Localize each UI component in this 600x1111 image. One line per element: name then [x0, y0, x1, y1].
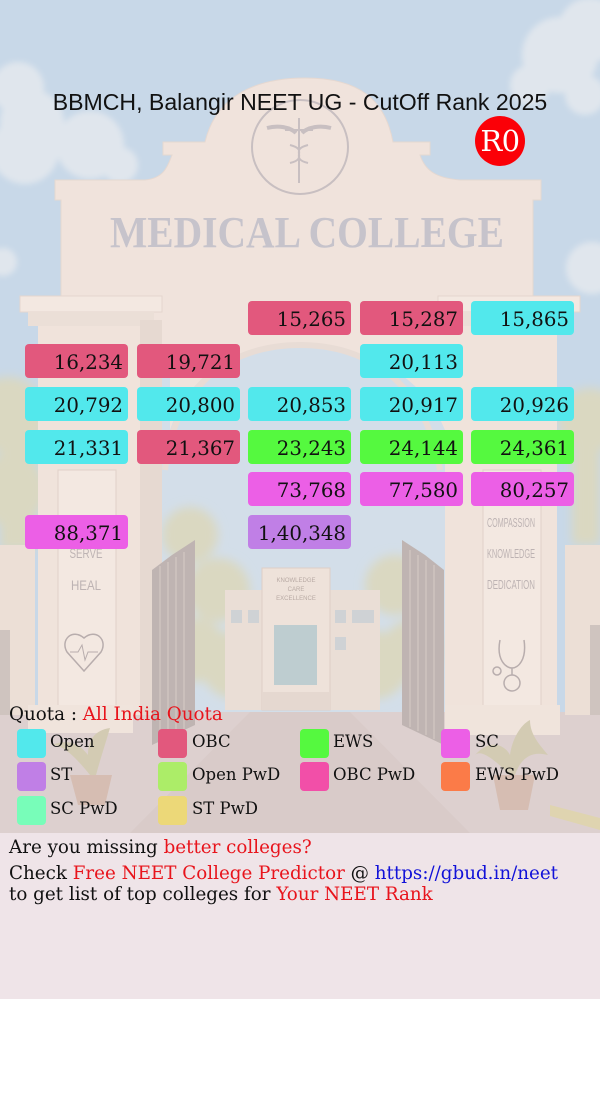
rank tile: 21,367 OBC: 21,367 [166, 437, 235, 460]
background illustration: medical college gate [0, 0, 600, 833]
rear building [225, 568, 380, 710]
cutoff rank tile grid [25, 301, 574, 549]
promo panel [0, 833, 600, 999]
rank tile: 20,926 Open: 20,926 [500, 394, 569, 417]
rank tile: 20,792 Open: 20,792 [54, 394, 123, 417]
rank tile: 15,865 Open [471, 301, 574, 335]
rank tile: 20,917 Open [360, 387, 463, 421]
round badge: R0: R0 [480, 124, 520, 158]
road [0, 712, 600, 833]
legend label: OBC: OBC [192, 732, 231, 751]
rank tile: 21,331 Open [25, 430, 128, 464]
gate top panel [55, 78, 541, 300]
legend swatch: EWS PwD [441, 762, 470, 791]
rank tile: 15,287 OBC [360, 301, 463, 335]
right pillar [438, 296, 580, 735]
left pillar: HEAL [71, 577, 101, 593]
rank tile: 15,265 OBC: 15,265 [277, 308, 346, 331]
rank tile: 19,721 OBC [137, 344, 240, 378]
pots and plants [52, 720, 548, 775]
legend swatch: Open PwD [158, 762, 187, 791]
legend swatch: EWS [300, 729, 329, 758]
legend label: EWS PwD: EWS PwD [475, 765, 559, 784]
rank tile: 80,257 SC: 80,257 [500, 479, 569, 502]
gate inscription: MEDICAL COLLEGE [110, 208, 504, 257]
promo line: college predictor link: Check Free NEET College Predictor @ https://gbud.in/neet [9, 863, 558, 884]
legend swatch: ST PwD [158, 796, 187, 825]
rank tile: 1,40,348 ST: 1,40,348 [258, 522, 346, 545]
rank tile: 80,257 SC [471, 472, 574, 506]
rank tile: 88,371 SC: 88,371 [54, 522, 123, 545]
round badge: R0 [475, 116, 525, 166]
rear building: KNOWLEDGE [276, 578, 316, 584]
rank tile: 21,367 OBC [137, 430, 240, 464]
rank tile: 19,721 OBC: 19,721 [166, 351, 235, 374]
rank tile: 20,917 Open: 20,917 [389, 394, 458, 417]
rank tile: 15,865 Open: 15,865 [500, 308, 569, 331]
legend label: ST: ST [50, 765, 72, 784]
legend label: EWS: EWS [333, 732, 373, 751]
legend swatch: Open [17, 729, 46, 758]
rank tile: 77,580 SC: 77,580 [389, 479, 458, 502]
right pillar: KNOWLEDGE [487, 546, 535, 561]
legend label: OBC PwD: OBC PwD [333, 765, 415, 784]
side walls [0, 545, 35, 715]
legend swatch: OBC [158, 729, 187, 758]
right pillar: DEDICATION [487, 577, 535, 592]
emblem [252, 100, 348, 194]
rank tile: 20,853 Open [248, 387, 351, 421]
promo line: missing better colleges: Are you missing better colleges? [9, 837, 312, 858]
legend swatch: SC [441, 729, 470, 758]
rank tile: 23,243 EWS [248, 430, 351, 464]
promo line: top colleges for your rank: to get list of top colleges for Your NEET Rank [9, 884, 433, 905]
inner sky [150, 345, 450, 715]
rank tile: 16,234 OBC [25, 344, 128, 378]
rear building: CARE [288, 587, 304, 593]
rank tile: 77,580 SC [360, 472, 463, 506]
left pillar [20, 296, 162, 733]
rank tile: 20,113 Open [360, 344, 463, 378]
title: BBMCH, Balangir NEET UG - CutOff Rank 2025 [53, 89, 547, 115]
rank tile: 20,926 Open [471, 387, 574, 421]
quota heading: Quota : All India Quota [9, 704, 223, 725]
legend swatch: SC PwD [17, 796, 46, 825]
rank tile: 15,287 OBC: 15,287 [389, 308, 458, 331]
legend label: SC PwD: SC PwD [50, 799, 118, 818]
legend label: Open: Open [50, 732, 94, 751]
rank tile: 1,40,348 ST [248, 515, 351, 549]
rank tile: 23,243 EWS: 23,243 [277, 437, 346, 460]
rank tile: 73,768 SC [248, 472, 351, 506]
rank tile: 73,768 SC: 73,768 [277, 479, 346, 502]
rank tile: 21,331 Open: 21,331 [54, 437, 123, 460]
rank tile: 20,800 Open: 20,800 [166, 394, 235, 417]
kerb [550, 805, 600, 830]
legend swatch: OBC PwD [300, 762, 329, 791]
legend swatch: ST [17, 762, 46, 791]
rank tile: 20,113 Open: 20,113 [389, 351, 458, 374]
rank tile: 20,800 Open [137, 387, 240, 421]
rear building: EXCELLENCE [276, 596, 316, 602]
legend label: Open PwD: Open PwD [192, 765, 280, 784]
trees [0, 377, 600, 699]
rank tile: 88,371 SC [25, 515, 128, 549]
left pillar: SERVE [70, 545, 102, 561]
rank tile: 24,144 EWS: 24,144 [389, 437, 458, 460]
legend [17, 729, 559, 825]
rank tile: 15,265 OBC [248, 301, 351, 335]
legend label: ST PwD: ST PwD [192, 799, 258, 818]
rank tile: 24,361 EWS [471, 430, 574, 464]
rank tile: 20,853 Open: 20,853 [277, 394, 346, 417]
rank tile: 20,792 Open [25, 387, 128, 421]
rank tile: 16,234 OBC: 16,234 [54, 351, 123, 374]
rank tile: 24,361 EWS: 24,361 [500, 437, 569, 460]
legend label: SC: SC [475, 732, 499, 751]
rank tile: 24,144 EWS [360, 430, 463, 464]
right pillar: COMPASSION [487, 515, 535, 530]
arch beam [150, 296, 450, 346]
iron gates [152, 540, 195, 745]
